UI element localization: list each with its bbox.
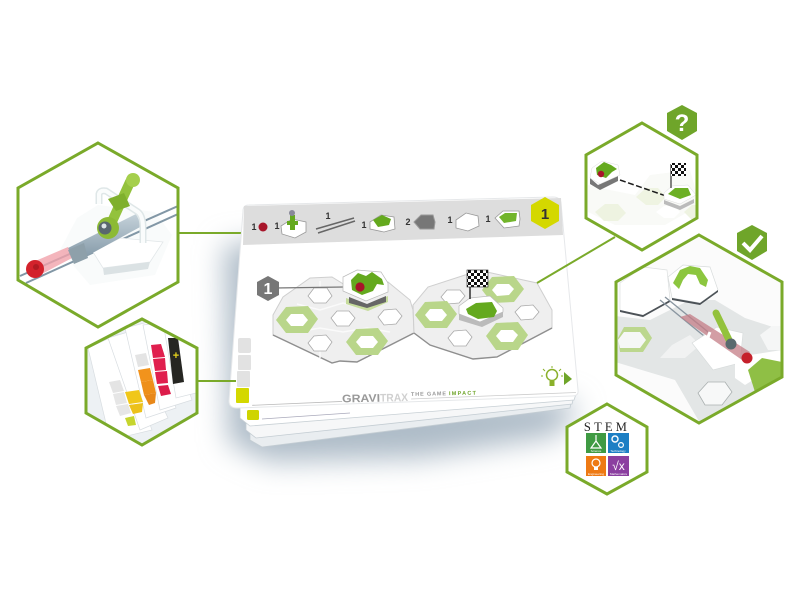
red marble: [742, 352, 752, 364]
icon: check badge: [737, 225, 767, 260]
card shadow: [224, 240, 580, 462]
icon: question badge: ?: [675, 110, 689, 137]
panel: solution photo: [615, 235, 782, 423]
grey tiles: [615, 300, 782, 423]
panel: launcher close-up: [18, 143, 178, 327]
green slot: [618, 327, 652, 352]
brand logo: IMPACT: [449, 391, 477, 397]
start step marker: [257, 276, 344, 301]
parts list: 2: [405, 217, 411, 227]
top white tile: [668, 265, 718, 303]
left white block: [620, 267, 670, 317]
red marble: [26, 260, 44, 278]
blue channel: [68, 214, 140, 254]
part: grey hex: [414, 215, 435, 229]
green goal tile: [748, 358, 782, 392]
hex slot: [515, 305, 539, 320]
mathematics tile: Mathematics: [610, 472, 627, 476]
parts list: 1: [361, 220, 367, 230]
brand logo: THE GAME: [411, 391, 446, 398]
rails: [660, 296, 708, 336]
red marble: [355, 282, 365, 292]
engineering tile: Engineering: [588, 472, 604, 476]
part: white curve tile: [456, 213, 479, 231]
technology tile: Technology: [610, 449, 626, 453]
parts list: 1: [447, 215, 453, 225]
mathematics tile: [608, 456, 629, 476]
goal piece with flag: [459, 270, 503, 327]
mathematics tile: √x: [612, 459, 625, 473]
STEM heading: STEM: [584, 420, 630, 434]
parts list: 1: [274, 221, 280, 231]
left hex cluster: [273, 277, 414, 363]
level badge: 1: [541, 206, 549, 223]
main card: [229, 197, 578, 408]
hex slot: [308, 335, 332, 351]
right hex cluster: [413, 272, 552, 359]
white arch: [99, 191, 143, 243]
lower card colour tab: [247, 410, 259, 420]
lower hex slot: [698, 382, 732, 405]
dashed route: [620, 180, 666, 196]
black tab with bolt: +: [173, 350, 179, 362]
hex slot: [331, 311, 355, 326]
panel: fanned level cards: [86, 319, 200, 445]
icon: question badge: [667, 105, 697, 140]
science tile: Science: [591, 449, 602, 453]
hex slot: [448, 330, 472, 346]
start step marker: 1: [264, 281, 273, 298]
red track: [680, 314, 750, 362]
panel: STEM badge: [567, 404, 647, 494]
white base: [93, 238, 163, 268]
green slot: [482, 276, 524, 303]
hex slot: [378, 309, 402, 325]
goal piece: [664, 163, 696, 210]
green lever: [707, 310, 736, 350]
brand logo: TRAX: [380, 392, 409, 405]
brand logo: [252, 389, 576, 407]
level badge: [531, 197, 559, 229]
icon: lightbulb hint with arrow: [541, 366, 572, 386]
colour difficulty tabs: [236, 338, 251, 403]
yellow tabs: [109, 380, 143, 426]
parts list: 1: [485, 214, 491, 224]
clamp: [68, 243, 88, 264]
brand logo: GRAVI: [342, 393, 380, 405]
right white base: [692, 327, 743, 370]
red tabs: [151, 344, 171, 396]
infographic canvas: [16, 105, 784, 496]
green slot: [276, 306, 318, 333]
connector: tabs to card: [197, 380, 236, 382]
card stack: [240, 394, 576, 447]
parts list: 1: [325, 211, 331, 221]
start piece with ball: [343, 270, 388, 311]
green slot: [346, 328, 388, 355]
panel: question, where does the marble go: [586, 123, 700, 250]
green slot: [486, 322, 528, 350]
part: green goal tile: [495, 211, 520, 228]
green slot: [415, 301, 457, 328]
card header band: [243, 198, 563, 245]
connector: launcher to card: [178, 232, 279, 234]
parts list: [251, 210, 520, 238]
green bumper: [673, 266, 708, 289]
hex slot: [441, 290, 465, 304]
hex slot: [308, 288, 332, 303]
green lever: [110, 182, 130, 226]
orange tabs: [135, 353, 156, 405]
red tube: [37, 247, 72, 274]
start piece: [590, 161, 620, 190]
faint tile: [60, 205, 172, 285]
part: green bumper tile: [370, 215, 395, 232]
connector: question panel to card: [537, 237, 615, 283]
part: launcher: [281, 210, 306, 238]
game board: [257, 270, 552, 363]
part: rails: [316, 218, 355, 233]
checkered flag: [467, 270, 488, 299]
parts list: 1: [251, 222, 257, 232]
rails: [20, 206, 178, 283]
faded board: [588, 170, 700, 225]
